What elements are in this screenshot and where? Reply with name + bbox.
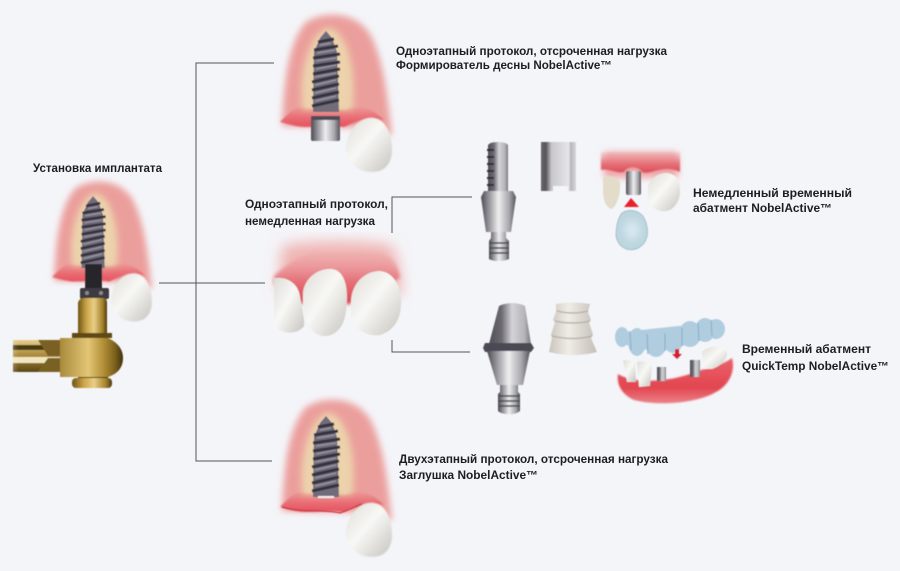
label: two-stage delayed loading: Двухэтапный протокол, отсроченная нагрузка	[399, 453, 669, 466]
illustration: temporary cap	[549, 302, 597, 355]
illustration: immediate temporary abutment	[601, 152, 680, 250]
illustration: small abutment	[481, 142, 516, 261]
label: immediate temporary abutment: Немедленный временный	[693, 187, 852, 200]
illustration: bridge over jaw	[615, 318, 733, 403]
label: QuickTemp abutment: Временный абатмент	[742, 343, 871, 356]
illustration: implant with healing abutment	[280, 15, 392, 172]
label: immediate temporary abutment	[693, 187, 852, 215]
label: QuickTemp abutment	[742, 343, 889, 373]
label: one-stage delayed loading	[396, 45, 668, 72]
label: one-stage immediate loading	[245, 198, 388, 228]
label: two-stage delayed loading	[399, 453, 669, 482]
label: one-stage delayed loading: Одноэтапный протокол, отсроченная нагрузка	[396, 45, 668, 58]
connector lines	[159, 63, 472, 461]
illustration: sleeve	[541, 142, 576, 191]
illustration: implant with cover screw	[280, 400, 392, 557]
heading: implant placement: Установка имплантата	[33, 162, 163, 175]
label: one-stage immediate loading: Одноэтапный протокол,	[245, 198, 388, 211]
label: one-stage immediate loading: немедленная нагрузка	[245, 215, 376, 228]
illustration: implant placement with handpiece	[13, 182, 152, 388]
illustration: large abutment	[483, 303, 534, 414]
label: immediate temporary abutment: абатмент NobelActive™	[693, 202, 832, 215]
label: two-stage delayed loading: Заглушка NobelActive™	[399, 469, 538, 482]
label: one-stage delayed loading: Формирователь десны NobelActive™	[396, 59, 612, 72]
label: QuickTemp abutment: QuickTemp NobelActive™	[742, 360, 889, 373]
illustration: three front teeth	[274, 242, 401, 336]
